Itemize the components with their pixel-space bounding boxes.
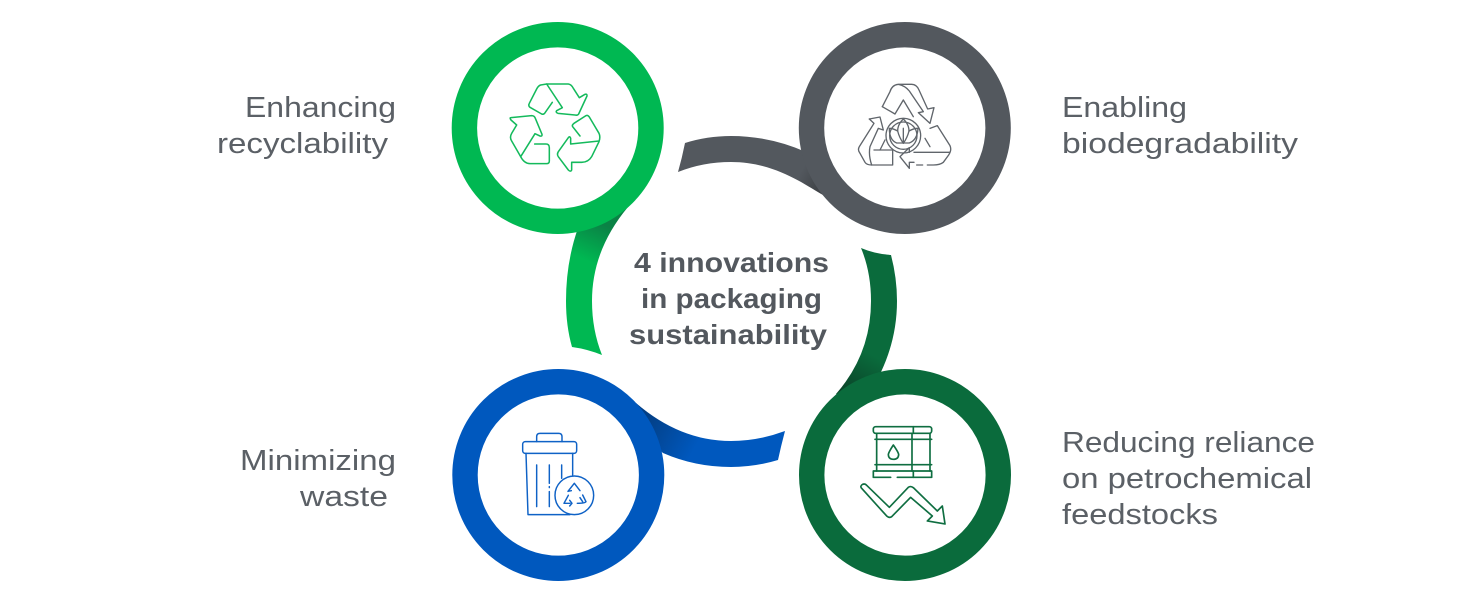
ring: minimizing waste: [465, 382, 652, 568]
heading: centre title: in packaging: [641, 283, 822, 314]
icon: waste bin with recycling badge: [523, 433, 594, 515]
ribbon: gray connector: [678, 136, 850, 195]
icon: oil barrel with falling arrow: [861, 427, 945, 524]
heading: centre title: [629, 247, 829, 350]
icon: recycling arrows: [510, 84, 600, 171]
label: enhancing recyclability: recyclability: [217, 128, 389, 160]
icon: biodegradable recycling leaf: [858, 84, 951, 168]
label: reducing reliance on petrochemical feedstocks: on petrochemical: [1062, 463, 1312, 495]
label: minimizing waste: Minimizing: [240, 445, 396, 477]
label: enabling biodegradability: biodegradability: [1062, 128, 1299, 160]
heading: centre title: 4 innovations: [634, 247, 829, 278]
label: enabling biodegradability: Enabling: [1062, 92, 1187, 124]
label: reducing reliance on petrochemical feedstocks: [1062, 427, 1315, 531]
label: enabling biodegradability: [1062, 92, 1299, 160]
label: enhancing recyclability: [217, 92, 396, 160]
heading: centre title: sustainability: [629, 319, 827, 350]
ring: biodegradability: [812, 35, 998, 221]
label: reducing reliance on petrochemical feedstocks: feedstocks: [1062, 499, 1218, 531]
ribbon: blue connector: [625, 403, 785, 467]
ring: recyclability: [464, 35, 651, 221]
label: reducing reliance on petrochemical feedstocks: Reducing reliance: [1062, 427, 1315, 459]
label: minimizing waste: [240, 445, 396, 513]
ribbon: green connector: [566, 205, 628, 355]
label: enhancing recyclability: Enhancing: [245, 92, 396, 124]
label: minimizing waste: waste: [299, 481, 388, 513]
ring: petrochemical feedstocks: [812, 382, 998, 568]
ribbon: dark green connector: [836, 248, 897, 405]
